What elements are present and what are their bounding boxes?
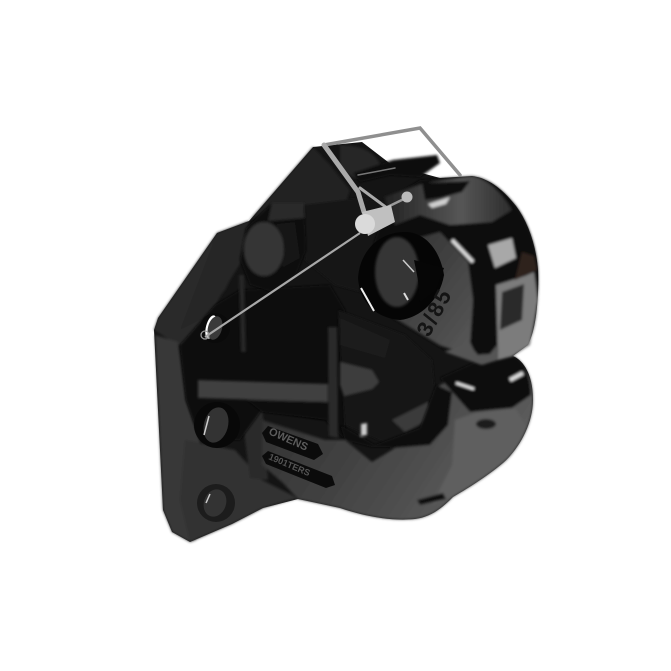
mounting hole: bottom (197, 484, 235, 522)
embossed maker lettering: 1901TERS (267, 452, 312, 478)
casting mark 3/85: 3/85 (411, 284, 457, 340)
inner web behind brace (338, 310, 436, 445)
hook body (262, 356, 533, 520)
embossed maker lettering: OWENS (267, 426, 310, 454)
large bolt, left (240, 203, 306, 292)
cotter pin and cable (201, 192, 412, 339)
mounting hole: top (200, 313, 230, 343)
mounting hole: middle (194, 402, 240, 448)
cross brace and vertical rib (198, 275, 338, 438)
mounting plate (154, 221, 298, 542)
recess around the plate holes (180, 285, 345, 440)
large bolt, right (358, 232, 444, 320)
coupling silhouette (154, 142, 538, 542)
embossed maker lettering (262, 426, 335, 488)
top casting and arm (249, 145, 440, 295)
head / latch housing (360, 176, 538, 365)
wire hoop handle (324, 128, 460, 212)
